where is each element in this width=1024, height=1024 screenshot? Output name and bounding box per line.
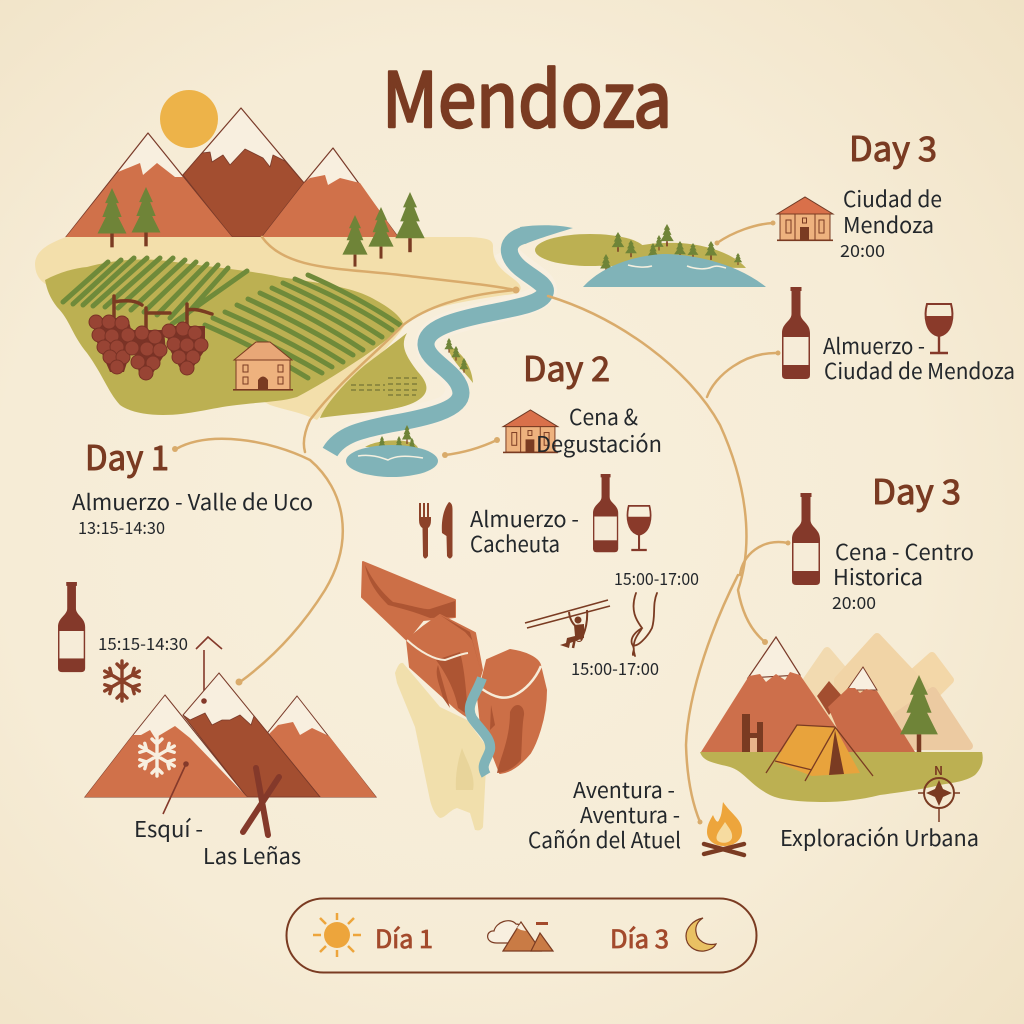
Cañón del Atuel block	[528, 773, 744, 855]
icon: cream snowflake	[140, 736, 174, 776]
mountains	[85, 673, 376, 797]
vineyard field	[45, 259, 403, 415]
label: Cañón del Atuel	[528, 823, 681, 855]
rock	[362, 562, 455, 640]
small field	[320, 333, 426, 418]
label: Las Leñas	[203, 839, 301, 871]
panel: lake and forest	[535, 224, 766, 287]
Day 3 top block	[777, 122, 942, 262]
label: Aventura -	[573, 773, 675, 805]
icon: house	[503, 410, 558, 453]
Day 1 block	[72, 431, 313, 539]
heading: Day 1	[85, 431, 169, 480]
far hills	[807, 637, 969, 750]
right mountain	[847, 667, 877, 690]
dark peak	[817, 681, 842, 715]
leader line	[163, 764, 186, 814]
icon: wine bottle	[792, 493, 820, 585]
Day 3 dinner block	[792, 465, 974, 614]
icon: skis	[243, 768, 279, 835]
heading: Day 3	[872, 465, 961, 514]
time: 13:15-14:30	[78, 514, 165, 539]
label: Día 3: Día 3	[610, 920, 669, 956]
rock	[478, 650, 546, 773]
panel: Las Leñas ski	[58, 582, 376, 871]
time: 20:00	[840, 237, 885, 262]
lake	[583, 254, 766, 287]
panel: canyon	[362, 562, 546, 830]
canyon river	[470, 678, 490, 775]
route lines	[176, 223, 788, 822]
farmhouse	[233, 342, 293, 391]
sand plain	[35, 237, 521, 420]
icon: sun	[313, 913, 361, 957]
label: Historica	[833, 560, 923, 592]
tree	[900, 675, 938, 752]
panel: adventure camp	[700, 637, 983, 853]
mountains	[66, 108, 398, 237]
vine rows left	[63, 258, 247, 324]
lunch block right	[782, 287, 1015, 386]
river	[330, 225, 573, 452]
sun	[160, 90, 218, 148]
pine trees	[98, 187, 425, 267]
legend	[286, 898, 756, 972]
label: Cena &	[569, 400, 638, 432]
grapes	[89, 315, 208, 380]
panel: valley map with vineyards	[35, 90, 521, 420]
title: Mendoza	[382, 39, 672, 149]
heading: Day 2	[523, 342, 610, 391]
icon: peak marker	[196, 637, 222, 702]
icon: snowflake	[105, 661, 139, 701]
icon: climbing rope	[632, 593, 657, 656]
label: Esquí -	[134, 812, 203, 844]
crop dashes	[351, 378, 420, 395]
compass	[918, 762, 960, 822]
label: Día 1: Día 1	[375, 920, 433, 956]
sand	[395, 663, 487, 830]
label: Degustación	[536, 427, 662, 459]
icon: wine glass	[926, 304, 952, 353]
icon: city house	[777, 197, 833, 241]
label: Almuerzo -	[470, 502, 579, 534]
vine stems	[114, 296, 212, 328]
small lake with island	[346, 425, 438, 477]
rock	[407, 615, 482, 717]
Day 2 block	[503, 342, 662, 459]
fort ruin	[742, 714, 763, 752]
label: Ciudad de Mendoza	[824, 354, 1015, 386]
icon: moon	[686, 918, 716, 951]
riverside trees	[444, 338, 473, 383]
label: Aventura -	[580, 798, 680, 830]
compass: N	[934, 762, 943, 779]
icon: wine bottle	[58, 582, 85, 672]
label: Mendoza	[843, 208, 934, 240]
icon: mountains and cloud	[488, 921, 553, 951]
label: Cena - Centro	[835, 535, 974, 567]
icon: wine bottle	[782, 287, 810, 379]
icon: campfire	[704, 802, 744, 855]
icon: zipline with rider	[525, 600, 610, 648]
icon: fork and knife	[419, 502, 452, 558]
time: 15:15-14:30	[98, 630, 188, 655]
time: 15:00-17:00	[571, 655, 659, 680]
label: Almuerzo - Valle de Uco	[72, 485, 313, 517]
label: Ciudad de	[843, 182, 942, 214]
lunch Cacheuta block	[419, 474, 651, 559]
label: Almuerzo -	[823, 329, 925, 361]
island	[535, 234, 645, 266]
sand shadow	[456, 748, 474, 790]
time: 15:00-17:00	[614, 565, 699, 590]
heading: Day 3	[849, 122, 937, 171]
icon: wine bottle	[593, 474, 618, 552]
time: 20:00	[832, 589, 876, 614]
leader dot	[183, 761, 189, 767]
legend frame	[286, 898, 756, 972]
rock crease	[365, 565, 455, 618]
left mountain	[748, 637, 800, 678]
label: Cacheuta	[470, 527, 560, 559]
tent	[766, 725, 873, 781]
route dots	[172, 220, 790, 824]
forest	[600, 224, 742, 273]
ground	[700, 752, 983, 802]
label: Exploración Urbana	[780, 821, 979, 853]
icon: wine glass	[628, 506, 651, 550]
vine rows right	[205, 275, 400, 378]
